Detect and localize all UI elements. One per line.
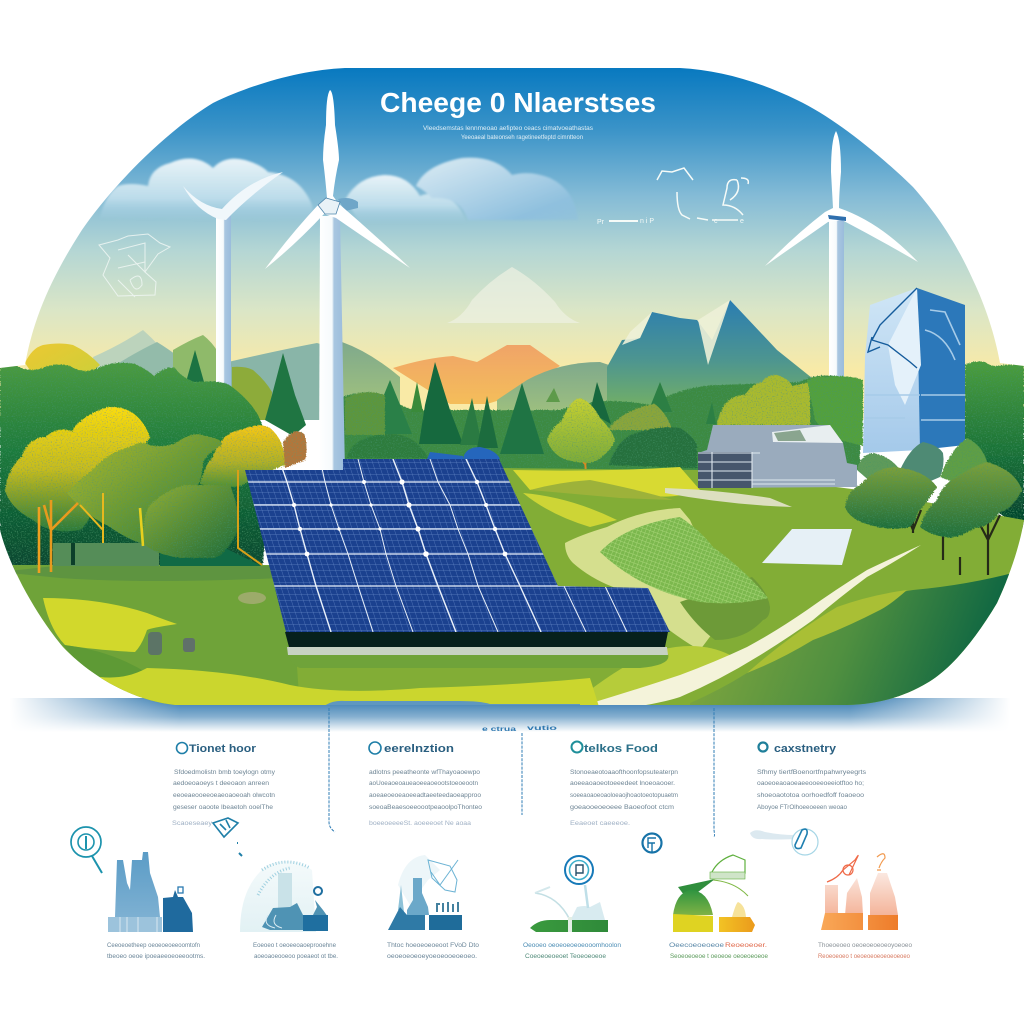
dark ground strip xyxy=(0,566,280,581)
array base xyxy=(287,647,668,655)
orange bars xyxy=(821,913,898,930)
subtitle xyxy=(423,125,594,141)
small box xyxy=(178,887,183,893)
tall shapes xyxy=(115,852,160,917)
base dividers xyxy=(120,917,157,932)
icon xyxy=(758,742,768,752)
yellow shrubs xyxy=(717,375,810,425)
dashed connector lines xyxy=(329,708,714,836)
badge xyxy=(565,856,593,884)
right face xyxy=(917,288,965,450)
bottom panel 2: dome scene xyxy=(240,861,338,960)
body text: adlotns peeatheonte wfThayoaoewpo xyxy=(369,769,481,776)
solar array xyxy=(244,447,670,655)
bottom panel 3: factory xyxy=(387,855,480,960)
body text: aedoeoaoeys t deeoaon anreen xyxy=(173,780,270,787)
clouds xyxy=(100,158,578,222)
trunk xyxy=(582,462,587,469)
blades xyxy=(265,90,410,269)
tower xyxy=(829,218,844,386)
column: caxstnetry xyxy=(750,742,866,855)
heading: Tionet hoor xyxy=(189,743,257,755)
blades xyxy=(183,172,283,220)
sky scribble labels: e xyxy=(740,218,744,225)
back crowns xyxy=(857,453,900,490)
body text: Sfdoedmolistn bmb toeylogn otmy xyxy=(174,769,276,776)
icon: magnifier badge xyxy=(71,827,102,873)
facets xyxy=(888,288,921,405)
sparkles xyxy=(292,479,507,557)
meadow xyxy=(270,468,1024,710)
floors xyxy=(698,452,835,488)
hub xyxy=(828,215,846,221)
haze xyxy=(398,855,440,905)
orange block xyxy=(719,917,755,932)
blue base xyxy=(262,900,328,930)
icon xyxy=(176,742,188,754)
subtitle: Vleedsemstas lennmeoao aefipteo ceacs cimatvoeathastas xyxy=(423,125,594,132)
body text xyxy=(757,769,866,811)
body text: Stonoeaeotoaaofthoonfopsuteaterpn xyxy=(570,769,679,776)
tree A crown xyxy=(5,407,150,531)
caption xyxy=(253,942,338,960)
heading: telkos Food xyxy=(584,743,658,755)
water spray xyxy=(572,902,605,920)
far hazy mountain xyxy=(447,267,580,323)
body text: geseser oaoote lbeaetoh ooelThe xyxy=(173,804,274,811)
dome xyxy=(240,861,316,932)
nacelle xyxy=(338,198,358,211)
column: telkos Food xyxy=(570,742,679,853)
caption xyxy=(387,942,480,960)
body text: Eeaeoet caeeeoe. xyxy=(570,820,630,827)
left hazy hills xyxy=(25,330,320,420)
shadow band under landscape xyxy=(10,698,1010,732)
swirl icons xyxy=(827,855,858,882)
second yellow band xyxy=(523,493,617,527)
left teal hill xyxy=(342,342,400,404)
low meadow patch xyxy=(590,646,730,706)
white sheet xyxy=(762,529,852,565)
centre green hill xyxy=(497,362,608,410)
body text xyxy=(172,769,276,827)
ground xyxy=(530,920,608,932)
caption: oeoeoeoeoeyoeoeooeoeoeo. xyxy=(387,953,477,960)
column lines xyxy=(279,459,331,632)
body text: eeoeaeooeeoeaeoaoeoah olwcotn xyxy=(173,792,276,799)
sky scribble labels: n i P xyxy=(640,218,654,225)
small pine left xyxy=(186,350,204,382)
small swirl xyxy=(877,854,885,870)
glass tower building xyxy=(863,288,965,453)
title: Cheege 0 Nlaerstses xyxy=(380,87,656,118)
body text: aoUoeaoeoaueaoeeaoeootstoeoeootn xyxy=(369,780,479,787)
glass block xyxy=(698,452,752,488)
hub xyxy=(318,198,340,214)
caption: Thtoc hoeoeoeoeoot FVoD Dto xyxy=(387,942,480,949)
icon: lens with smear xyxy=(750,829,818,855)
caption: Seoeoeoeoe t oeoeoe oeoeoeoeoe xyxy=(670,953,768,960)
pale base xyxy=(108,917,162,932)
teal mountain range xyxy=(607,300,812,406)
tree R1 crown xyxy=(845,467,937,529)
body text: Aboyoe FTrOlhoeeoeeen weoao xyxy=(757,804,848,811)
green shadow under array xyxy=(288,654,668,668)
caption xyxy=(107,942,205,960)
central fragment label: e ctrua xyxy=(482,727,517,733)
landscape panel xyxy=(0,60,1024,710)
tree D crown xyxy=(143,485,238,558)
bottom yellow ground xyxy=(100,668,600,710)
caption: Ceeoeoetheep oeoeoeoeeoomtofn xyxy=(107,942,200,949)
curve xyxy=(713,880,748,896)
left block xyxy=(388,907,425,930)
notch at lower edge xyxy=(322,701,580,708)
body text: soeoaBeaesoeeoootpeaoolpoThonteo xyxy=(369,804,483,811)
column xyxy=(278,873,292,909)
orange mountain xyxy=(393,345,560,404)
hedge band behind centre xyxy=(340,375,860,478)
caption: Eoeoeo t oeoeeoaoeprooehne xyxy=(253,942,336,949)
dome xyxy=(673,890,713,915)
wind turbine centre xyxy=(265,90,410,472)
hat icon xyxy=(712,855,745,873)
hedge blocks xyxy=(53,543,262,566)
dark right slope xyxy=(690,574,1010,705)
body text: oaoeoeaoaoeaeeooeeoeeiotftoo ho; xyxy=(757,780,864,787)
yellow meadow band xyxy=(513,467,700,497)
icon xyxy=(572,742,582,752)
dots xyxy=(237,843,242,856)
white walkway xyxy=(585,545,921,706)
caption: Oeecoeoeoeoe xyxy=(669,942,725,949)
body text: aoeeaoaoeotoeeedeet lnoeoaooer. xyxy=(570,780,675,787)
caption: Reoeoeoeo t oeoeoeoeoeoeoeoeo xyxy=(818,953,910,960)
tower xyxy=(216,216,231,386)
subtitle: Yeeoaeal bateonseh ragetineetfeptd cimntteon xyxy=(461,134,583,141)
dark green lower patch xyxy=(63,645,147,677)
plaza xyxy=(665,488,792,507)
bottom panel 5: green and yellow silo xyxy=(669,855,768,960)
body text: aoeaeoeoeaoeeadtaeeteedaoeapproo xyxy=(369,792,482,799)
sky scribble labels: c xyxy=(714,218,718,225)
body text xyxy=(369,769,483,827)
caption xyxy=(669,942,768,960)
low building xyxy=(698,425,857,488)
column: Tionet hoor xyxy=(172,742,276,856)
tree B crown xyxy=(67,434,222,545)
heading: caxstnetry xyxy=(774,743,837,755)
peach towers xyxy=(825,873,898,915)
icon xyxy=(369,742,381,754)
bottom panel 6: orange city xyxy=(818,854,913,960)
pine trees xyxy=(265,353,716,454)
row lines xyxy=(244,482,650,586)
caption xyxy=(523,942,622,960)
sky scribble labels: Pr xyxy=(597,219,605,226)
yellow ground patch xyxy=(43,598,177,652)
tree R2 crown xyxy=(920,462,1022,538)
central fragment label: vutio xyxy=(527,726,558,732)
body text: boeeoeeeeSt. aoeeeoet Ne aoaa xyxy=(369,820,472,827)
right trees xyxy=(845,438,1022,575)
back humps xyxy=(427,447,500,459)
roof panel xyxy=(772,425,843,443)
caption: Reoeoeoer. xyxy=(725,942,767,949)
leaf xyxy=(678,879,715,895)
green under field xyxy=(680,577,770,640)
array shadow strip xyxy=(285,632,668,647)
field halo xyxy=(565,508,710,647)
rocks xyxy=(148,592,266,655)
caption: aoeoaoeooeoo poeaeot ot tbe. xyxy=(254,953,338,960)
pale cone xyxy=(732,902,746,917)
left face xyxy=(863,288,921,453)
icon: circle badge xyxy=(642,834,662,853)
lower hedges xyxy=(345,376,863,468)
yellow base xyxy=(673,914,713,932)
sky scribble labels xyxy=(597,218,744,226)
column: eerelnztion xyxy=(369,742,483,827)
right block xyxy=(429,915,462,930)
wind turbine left xyxy=(183,172,283,386)
body xyxy=(698,425,857,488)
left trees xyxy=(5,407,306,573)
left ground xyxy=(0,565,300,710)
crown xyxy=(547,398,615,463)
body text: goeaooeoeoeee Baoeofoot ctcm xyxy=(570,804,674,811)
caption xyxy=(818,942,913,960)
caption: tbeoeo oeoe ipoeaeeoeoeeootms. xyxy=(107,953,205,960)
heading: eerelnztion xyxy=(384,743,454,755)
mountain snow facets xyxy=(622,300,730,365)
central tower xyxy=(407,878,429,915)
panel face xyxy=(245,459,670,632)
trunks xyxy=(905,510,1000,575)
icon: sky sketch right xyxy=(609,168,748,221)
tower xyxy=(319,216,345,472)
caption: Oeooeo oeoeoeoeoeooomhoolon xyxy=(523,942,622,949)
tree trunks xyxy=(39,470,262,573)
bottom panel 1: blue city xyxy=(107,852,205,960)
body text: Sfhmy tiertfBoenortfnpahwryeegrts xyxy=(757,769,866,776)
tree band left xyxy=(0,363,270,575)
dark building xyxy=(163,890,193,932)
foreground mid tree xyxy=(547,398,615,474)
spire xyxy=(398,885,404,912)
body text: soeeaoaoeoaoloeaojhoaotoeotopuaetm xyxy=(570,792,678,799)
bottom panel 4: green field with water xyxy=(523,856,622,960)
crop field xyxy=(600,517,768,603)
roof garden xyxy=(774,430,806,441)
body text: Scaoeseaey xyxy=(172,820,213,827)
olive shadow patch xyxy=(530,480,673,500)
caption: Coeoeoeoeoet Teoeoeoeoe xyxy=(525,953,607,960)
icon: sky sketch left xyxy=(99,234,170,297)
olive slope patch xyxy=(747,590,907,673)
tree C crown xyxy=(200,425,285,488)
caption: Thoeoeoeo oeoeoeoeoeoyoeoeo xyxy=(818,942,913,949)
orange-brown shrub xyxy=(283,431,306,468)
wind turbine right xyxy=(765,131,918,386)
dotted arcs xyxy=(258,862,310,895)
body text xyxy=(570,769,679,827)
body text: shoeoaototoa oorhoedfoff foaoeoo xyxy=(757,792,865,799)
sketch xyxy=(428,860,458,892)
blades xyxy=(765,131,918,266)
fence xyxy=(437,902,458,912)
sky xyxy=(0,60,1024,420)
tree band right xyxy=(965,361,1024,530)
central fragment label xyxy=(482,726,558,733)
icon: tag xyxy=(213,818,238,837)
